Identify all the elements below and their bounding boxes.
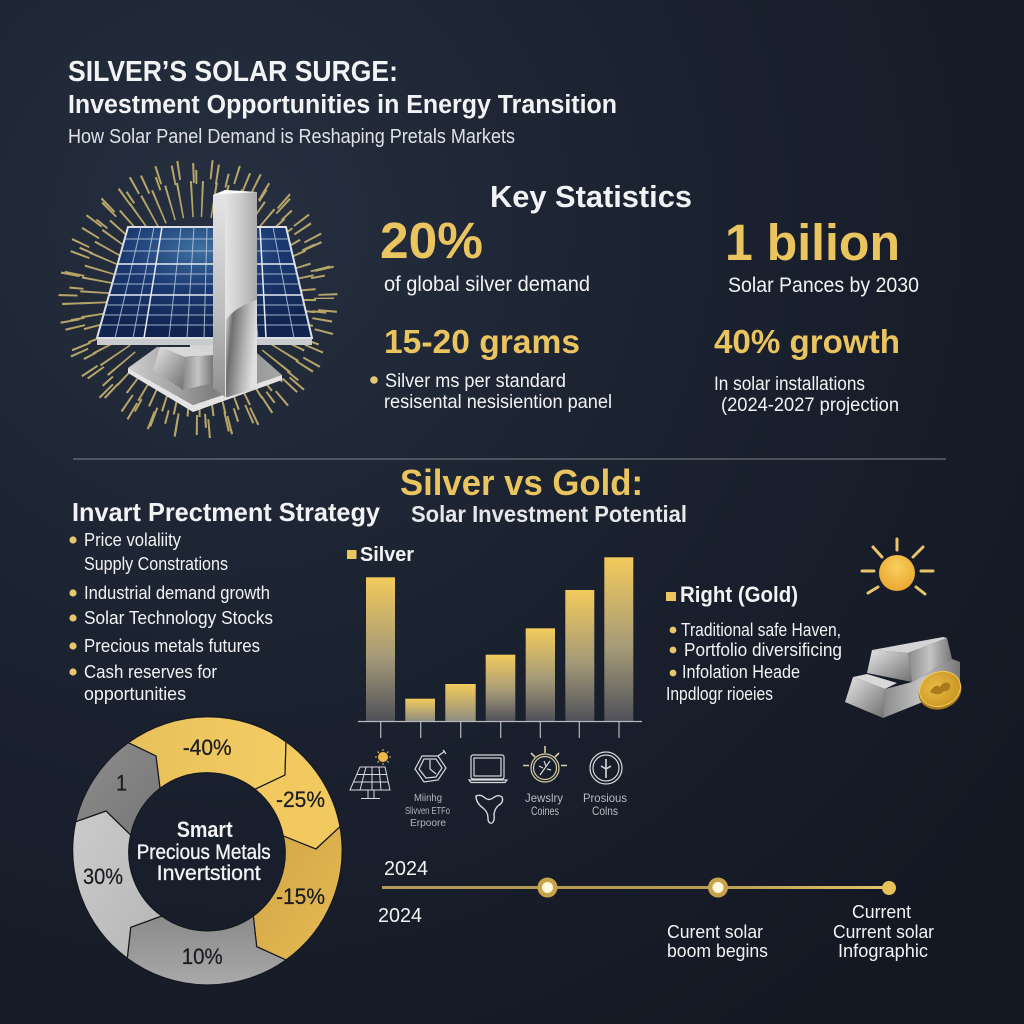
main title: SILVER’S SOLAR SURGE: xyxy=(68,56,398,88)
stat: 40% growth: 40% growth xyxy=(714,323,900,360)
donut center text: Precious Metals xyxy=(137,841,271,864)
donut center text: Invertstiont xyxy=(157,862,261,885)
donut labels: 1 xyxy=(116,771,127,796)
panel: investment strategy list: Cash reserves for xyxy=(84,661,217,682)
timeline labels: boom begins xyxy=(667,940,768,961)
stat: 20% of global silver demand xyxy=(380,212,590,296)
legend and list: gold: Inpdlogr rioeies xyxy=(666,684,773,704)
legend and list: gold: Infolation Heade xyxy=(682,662,800,682)
panel: investment strategy list: Industrial demand growth xyxy=(84,582,270,603)
legend and list: gold: Portfolio diversificing xyxy=(684,640,842,660)
stat: 40% growth: In solar installations xyxy=(714,374,865,395)
stat: 15-20 grams xyxy=(370,323,612,413)
legend and list: gold: Traditional safe Haven, xyxy=(681,620,841,640)
timeline labels: Current xyxy=(852,901,911,922)
icon: precious coin xyxy=(590,752,622,784)
segment: -15% xyxy=(253,827,342,960)
panel: investment strategy list: Precious metals futures xyxy=(84,635,260,656)
heading: silver vs gold xyxy=(400,462,687,527)
timeline marker 1 xyxy=(538,878,558,898)
panel: investment strategy list: Invart Prectment Strategy xyxy=(72,497,381,527)
icon: jewelry sun ring xyxy=(523,746,567,782)
label: mining silver ETFs: Slivven ETFo xyxy=(405,805,450,817)
panel: investment strategy list: Solar Technology Stocks xyxy=(84,607,273,628)
stat: 1 billion solar panels xyxy=(725,214,919,297)
timeline labels: 2024 xyxy=(378,905,422,927)
heading: silver vs gold: Solar Investment Potential xyxy=(411,501,687,527)
segment: 10% xyxy=(127,916,286,985)
segment: 30% xyxy=(73,811,162,958)
donut labels: 30% xyxy=(83,864,123,889)
legend: silver: Silver xyxy=(360,544,414,566)
panel: investment strategy list xyxy=(69,497,381,704)
timeline labels xyxy=(378,858,934,961)
timeline labels: Infographic xyxy=(838,940,928,961)
stat: 40% growth xyxy=(714,323,900,416)
tagline: How Solar Panel Demand is Reshaping Pretals Markets xyxy=(68,126,515,148)
stat: 1 billion solar panels: Solar Pances by 2030 xyxy=(728,274,919,297)
silver block xyxy=(153,345,213,390)
icon: money bag xyxy=(415,750,446,782)
stat: 1 billion solar panels: 1 bilion xyxy=(725,214,900,271)
stat: 15-20 grams: resisental nesisiention panel xyxy=(384,391,612,413)
segment: 1 xyxy=(76,743,160,835)
silver bar xyxy=(213,190,257,397)
donut labels: -15% xyxy=(276,884,325,909)
timeline marker 2 xyxy=(708,878,728,898)
stat: 15-20 grams: 15-20 grams xyxy=(384,323,580,360)
title block xyxy=(68,56,617,148)
label: precious coins: Prosious xyxy=(583,791,627,805)
segment: -25% xyxy=(255,742,340,849)
panel: investment strategy list: Price volaliity xyxy=(84,529,182,550)
segment: -40% xyxy=(128,717,286,789)
icon: solar panel with sun xyxy=(350,749,391,798)
icon: silver ingots and gold coin xyxy=(845,637,967,718)
legend and list: gold: Right (Gold) xyxy=(680,582,798,607)
heading: silver vs gold: Silver vs Gold: xyxy=(400,462,643,503)
donut labels: 10% xyxy=(182,944,223,969)
icon: sun xyxy=(862,539,933,594)
subtitle: Investment Opportunities in Energy Transition xyxy=(68,91,617,119)
label: mining silver ETFs: Miinhg xyxy=(414,792,442,804)
base plate xyxy=(128,368,282,412)
donut center text: Smart xyxy=(177,817,233,842)
donut center text xyxy=(137,817,271,885)
heading: key statistics: Key Statistics xyxy=(490,179,692,214)
bar chart xyxy=(358,557,642,738)
donut labels: -25% xyxy=(276,787,325,812)
illustration: solar panel with silver bar and sunburst xyxy=(68,169,328,429)
stat: 20% of global silver demand: of global silver demand xyxy=(384,273,590,296)
label: jewelry coins xyxy=(525,791,563,818)
label: precious coins xyxy=(583,791,627,818)
label: mining silver ETFs: Erpoore xyxy=(410,817,446,829)
timeline marker 3 xyxy=(882,881,896,895)
legend and list: gold xyxy=(666,582,842,704)
solar panel xyxy=(97,227,312,345)
donut chart xyxy=(73,717,342,985)
stat: 15-20 grams: Silver ms per standard xyxy=(385,370,566,392)
donut labels: -40% xyxy=(183,735,232,760)
stat: 20% of global silver demand: 20% xyxy=(380,212,483,269)
label: mining silver ETFs xyxy=(405,792,450,829)
label: jewelry coins: Coines xyxy=(531,804,559,818)
timeline labels: Curent solar xyxy=(667,921,763,942)
icon: necklace xyxy=(476,795,503,823)
timeline labels: 2024 xyxy=(384,858,428,880)
panel: investment strategy list: opportunities xyxy=(84,683,186,704)
stat: 40% growth: (2024-2027 projection xyxy=(721,395,899,416)
timeline labels: Current solar xyxy=(833,921,934,942)
sunburst rays xyxy=(68,169,328,429)
timeline xyxy=(378,858,934,961)
panel: investment strategy list: Supply Constrations xyxy=(84,553,228,574)
icon: laptop xyxy=(469,755,507,782)
donut labels xyxy=(83,735,325,969)
label: jewelry coins: Jewslry xyxy=(525,791,563,805)
label: precious coins: Colns xyxy=(592,804,618,818)
